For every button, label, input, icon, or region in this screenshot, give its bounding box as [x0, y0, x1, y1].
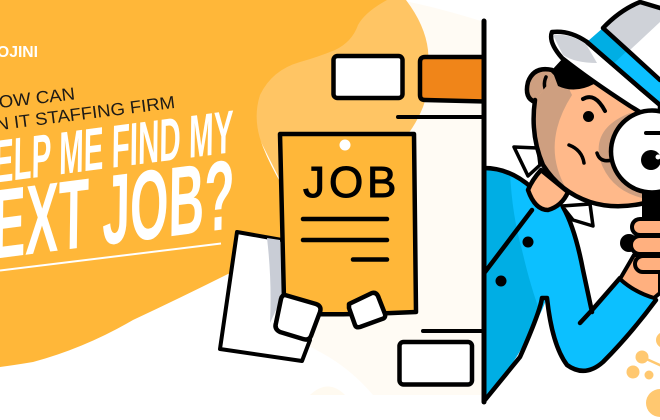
eyebrow — [583, 97, 605, 111]
mouth — [569, 145, 584, 163]
head — [534, 57, 660, 206]
eye — [583, 111, 594, 122]
magnifying glass — [611, 110, 660, 192]
panel: job document — [280, 134, 416, 314]
connector line bottom — [423, 329, 484, 333]
connector line top — [398, 115, 484, 119]
wrist and hand — [620, 190, 660, 298]
heading — [0, 83, 235, 285]
sticky note right — [349, 293, 385, 327]
hair — [552, 57, 594, 90]
coat — [484, 168, 656, 400]
panel: white back sheet — [220, 232, 310, 361]
neck — [528, 170, 568, 210]
white box top — [334, 56, 402, 98]
nose — [597, 153, 612, 161]
vertical divider — [482, 21, 486, 402]
job word: JOB — [303, 158, 396, 207]
orange box top — [420, 57, 484, 102]
decorative orange dots — [626, 332, 660, 417]
document text lines — [303, 219, 387, 260]
heading underline — [0, 244, 221, 270]
sticky note left — [276, 295, 320, 340]
hat — [551, 2, 660, 125]
fingers — [631, 219, 660, 272]
thumb — [620, 234, 638, 252]
white box bottom — [400, 342, 472, 384]
detective character — [484, 2, 660, 400]
collar — [514, 147, 593, 226]
magnifier handle — [642, 190, 660, 226]
ear — [527, 69, 566, 105]
